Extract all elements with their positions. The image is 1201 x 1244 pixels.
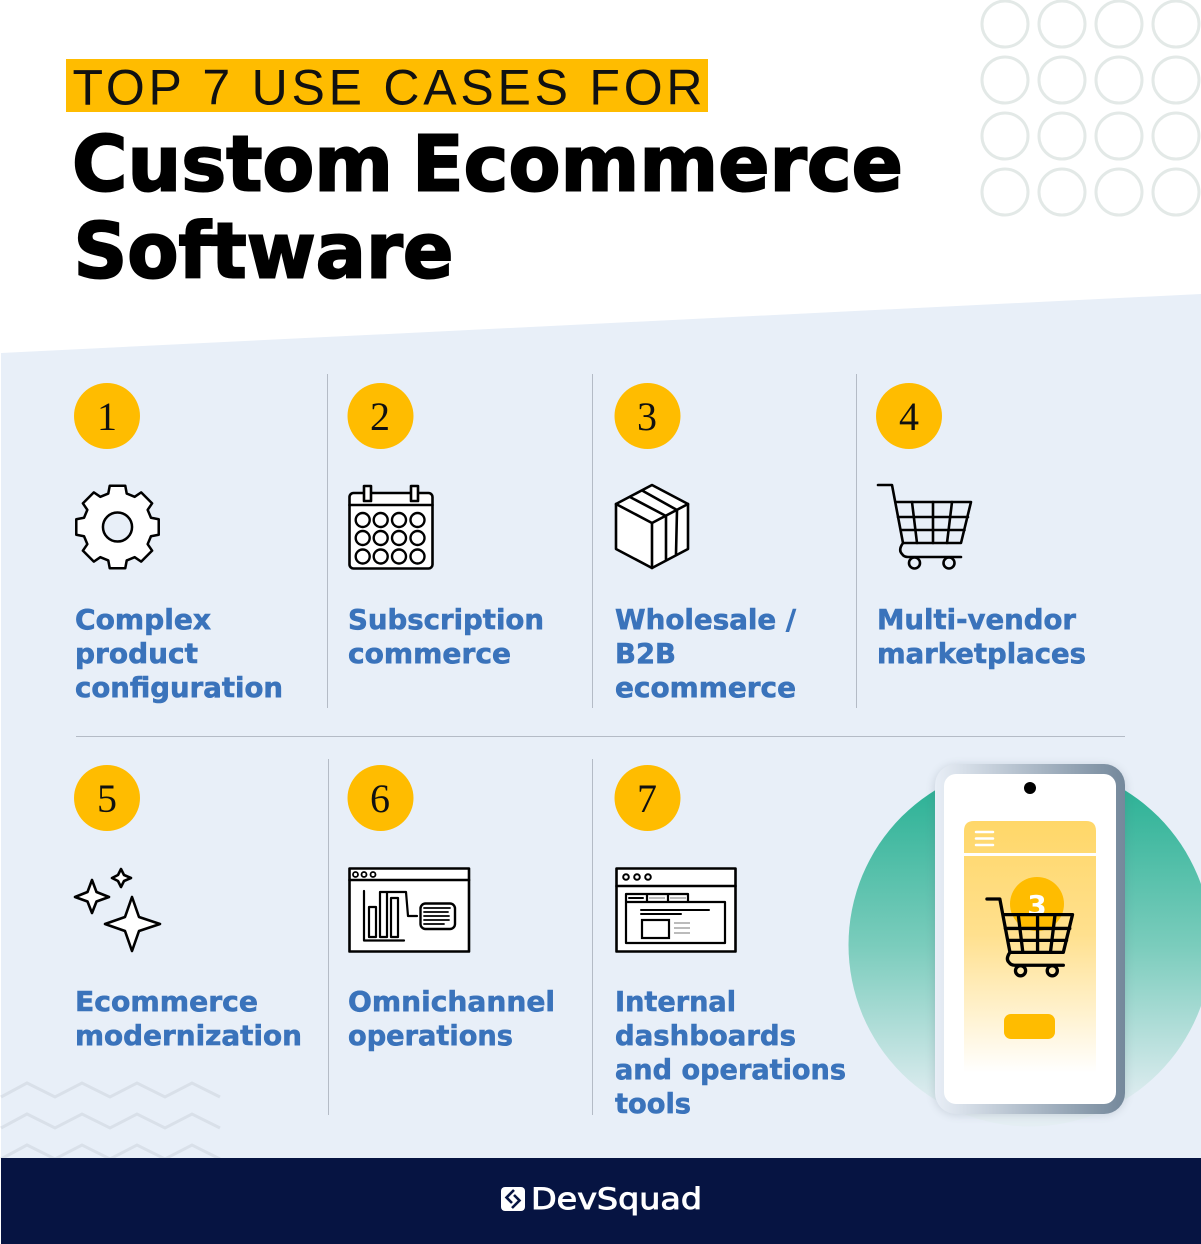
camera — [1024, 782, 1036, 794]
app header divider — [964, 853, 1096, 856]
item 5: ecommerce modernization — [74, 765, 302, 1052]
phone body — [935, 764, 1125, 1114]
title main line 1 — [72, 120, 903, 210]
label: B2B — [615, 637, 676, 670]
item 4: multi-vendor marketplaces — [876, 383, 1086, 670]
label — [615, 985, 846, 1120]
dividers — [76, 374, 1125, 1115]
phone illustration — [933, 764, 1127, 1116]
number badge 6: 6 — [370, 776, 390, 821]
label: configuration — [75, 671, 283, 704]
number badge 5 — [74, 765, 140, 831]
decorative circle grid — [982, 1, 1199, 215]
label: Ecommerce — [75, 985, 258, 1018]
icon: chart window — [350, 868, 469, 952]
number badge 5: 5 — [97, 776, 117, 821]
button — [1004, 1014, 1055, 1039]
label — [348, 603, 544, 670]
item 1: complex product configuration — [74, 383, 283, 704]
app panel — [964, 821, 1096, 1073]
title main line 1: Custom — [72, 120, 393, 210]
label: Omnichannel — [348, 985, 555, 1018]
label: Wholesale / — [615, 603, 797, 636]
background panel — [1, 294, 1201, 1158]
label: product — [75, 637, 198, 670]
title highlight line: TOP 7 USE CASES FOR — [72, 60, 702, 116]
icon: box — [616, 485, 688, 568]
number badge 7: 7 — [637, 776, 657, 821]
number badge 2: 2 — [370, 394, 390, 439]
number badge 3 — [614, 383, 680, 449]
label: commerce — [348, 637, 511, 670]
title main line 1: Ecommerce — [412, 120, 903, 210]
number badge 6 — [348, 765, 414, 831]
hamburger menu — [976, 832, 993, 845]
icon: gear — [76, 486, 159, 568]
label: ecommerce — [615, 671, 796, 704]
decorative zigzag — [1, 1083, 220, 1159]
coin badge — [1010, 877, 1064, 931]
label: modernization — [75, 1019, 302, 1052]
coin badge: 3 — [1027, 889, 1047, 922]
icon: sparkles — [75, 869, 160, 951]
item 7: internal dashboards — [614, 765, 846, 1120]
label: Complex — [75, 603, 211, 636]
logo icon — [501, 1187, 525, 1211]
shopping cart on screen — [987, 899, 1073, 976]
number badge 1 — [74, 383, 140, 449]
label: tools — [615, 1087, 691, 1120]
teal gradient circle — [848, 790, 1201, 1100]
phone screen — [944, 774, 1116, 1104]
label: operations — [348, 1019, 513, 1052]
item 6: omnichannel operations — [348, 765, 555, 1052]
label: dashboards — [615, 1019, 796, 1052]
number badge 1: 1 — [97, 394, 117, 439]
label — [75, 985, 302, 1052]
label: marketplaces — [877, 637, 1086, 670]
label — [877, 603, 1086, 670]
icon: dashboard window — [616, 868, 736, 952]
icon: shopping cart — [878, 485, 971, 568]
label: Internal — [615, 985, 736, 1018]
label — [348, 985, 555, 1052]
logo wordmark: DevSquad — [531, 1182, 702, 1216]
label — [75, 603, 283, 704]
icon: calendar — [350, 486, 432, 568]
label: Subscription — [348, 603, 544, 636]
label: and operations — [615, 1053, 846, 1086]
item 3: wholesale b2b — [614, 383, 797, 704]
number badge 2 — [348, 383, 414, 449]
title main line 2: Software — [74, 208, 454, 296]
label — [615, 603, 797, 704]
label: Multi-vendor — [877, 603, 1076, 636]
item 2: subscription commerce — [348, 383, 544, 670]
number badge 3: 3 — [637, 394, 657, 439]
number badge 4 — [876, 383, 942, 449]
number badge 4: 4 — [899, 394, 919, 439]
number badge 7 — [614, 765, 680, 831]
footer bar — [1, 1158, 1201, 1244]
